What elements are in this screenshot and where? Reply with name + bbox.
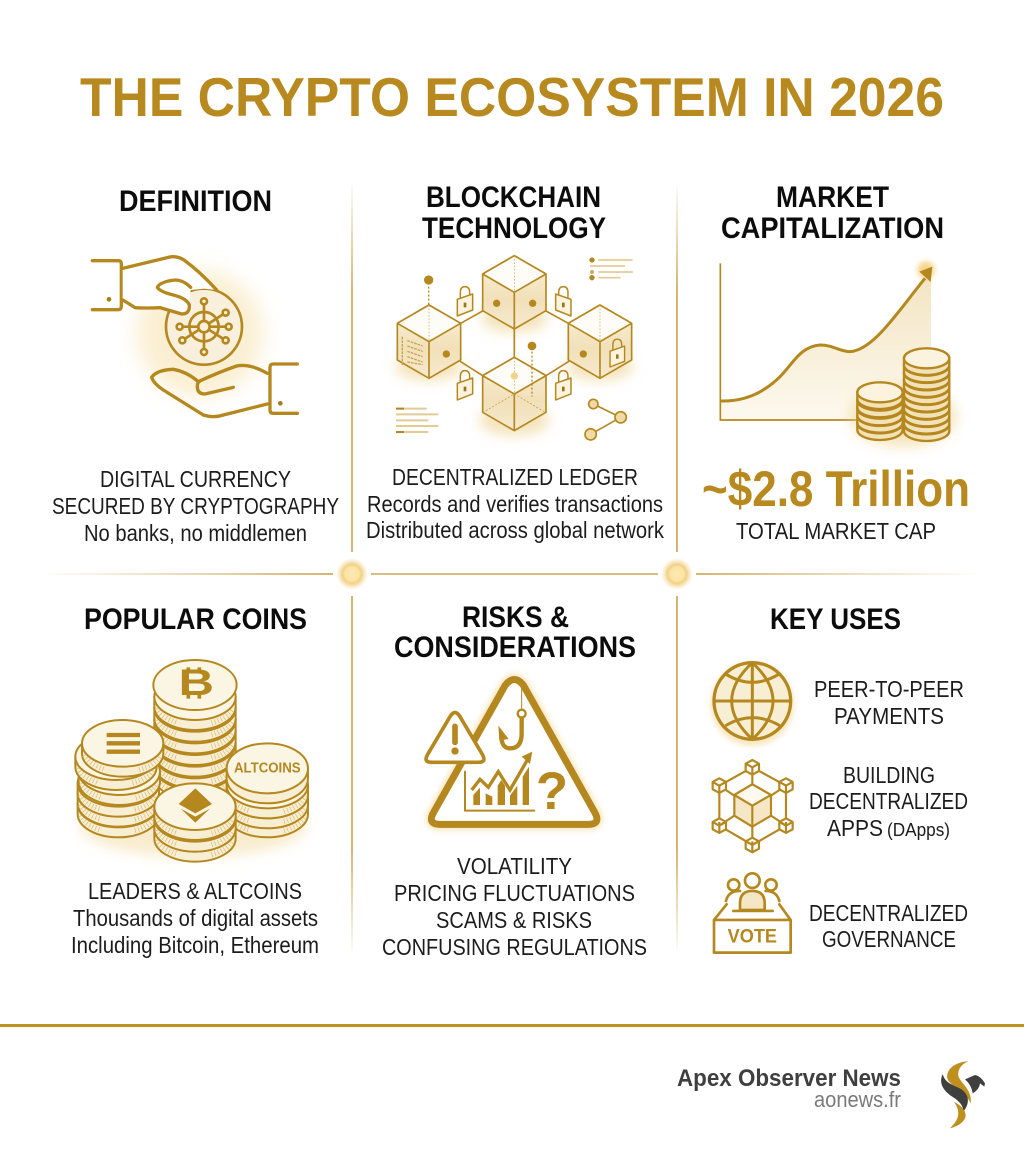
panel: risks and considerations	[382, 601, 647, 960]
bitcoin symbol: B	[179, 661, 214, 703]
text: risks	[382, 853, 647, 960]
footer brand	[677, 1061, 985, 1128]
heading: popular coins: POPULAR COINS	[84, 603, 307, 636]
text: blockchain: DECENTRALIZED LEDGER	[392, 464, 638, 490]
text: total market cap label: TOTAL MARKET CAP	[736, 518, 936, 544]
logo	[941, 1061, 985, 1128]
text: popular coins	[71, 878, 319, 958]
icon: warning triangles: ?	[536, 762, 568, 821]
panel: definition	[52, 185, 339, 546]
figure: total market cap: ~$2.8 Trillion	[702, 461, 970, 517]
heading: blockchain technology: TECHNOLOGY	[422, 212, 606, 245]
text: risks: CONFUSING REGULATIONS	[382, 934, 647, 960]
text: blockchain: Distributed across global network	[366, 517, 664, 543]
heading: market capitalization: CAPITALIZATION	[721, 212, 944, 245]
text: peer-to-peer: PAYMENTS	[834, 703, 944, 729]
heading: risks and considerations: CONSIDERATIONS	[394, 631, 636, 664]
title: THE CRYPTO ECOSYSTEM IN 2026	[80, 66, 944, 128]
text: definition	[52, 466, 339, 546]
text: decentralized apps: (DApps)	[887, 820, 950, 840]
text: definition: DIGITAL CURRENCY	[100, 466, 291, 492]
text: popular coins: Including Bitcoin, Ethereum	[71, 932, 319, 958]
brand name: Apex Observer News	[677, 1065, 901, 1092]
heading: market capitalization: MARKET	[776, 181, 889, 214]
heading: blockchain technology	[422, 181, 606, 245]
text: risks: SCAMS & RISKS	[436, 907, 592, 933]
text: governance: GOVERNANCE	[822, 926, 956, 952]
heading: market capitalization	[721, 181, 944, 245]
icon: vote box: VOTE	[728, 926, 777, 947]
icon: coin stacks	[75, 660, 308, 862]
panel: market capitalization	[702, 181, 970, 544]
panel: blockchain technology	[366, 181, 664, 543]
icon: decentralized network	[713, 760, 793, 852]
icon: vote box	[714, 873, 791, 953]
text: decentralized apps: BUILDING	[843, 762, 935, 788]
chart: market cap growth	[720, 261, 957, 447]
text: definition: No banks, no middlemen	[84, 520, 307, 546]
text: definition: SECURED BY CRYPTOGRAPHY	[52, 493, 339, 519]
icon: blockchain network	[396, 256, 633, 440]
text: decentralized apps	[809, 762, 968, 841]
icon: hands exchanging coin	[92, 257, 297, 417]
text: decentralized apps: APPS	[827, 815, 883, 841]
heading: definition: DEFINITION	[119, 185, 272, 218]
text: popular coins: LEADERS & ALTCOINS	[88, 878, 302, 904]
text: blockchain	[366, 464, 664, 543]
text: blockchain: Records and verifies transactions	[367, 491, 663, 517]
text: decentralized apps: DECENTRALIZED	[809, 788, 968, 814]
heading: blockchain technology: BLOCKCHAIN	[426, 181, 601, 214]
text: governance	[809, 900, 968, 952]
text: risks: PRICING FLUCTUATIONS	[394, 880, 635, 906]
panel: key uses	[711, 603, 968, 953]
text: peer-to-peer: PEER-TO-PEER	[814, 676, 964, 702]
panel: popular coins	[71, 603, 319, 958]
heading: risks and considerations	[394, 601, 636, 664]
heading: key uses: KEY USES	[770, 603, 901, 636]
grid dividers	[40, 180, 981, 956]
icon: warning triangles	[426, 679, 597, 824]
heading: risks and considerations: RISKS &	[462, 601, 569, 634]
icon: globe	[711, 663, 794, 746]
text: popular coins: Thousands of digital assets	[73, 905, 318, 931]
text: governance: DECENTRALIZED	[809, 900, 968, 926]
brand url: aonews.fr	[814, 1087, 901, 1112]
text: peer-to-peer	[814, 676, 964, 729]
icon: coin stacks: ALTCOINS	[234, 761, 301, 777]
text: risks: VOLATILITY	[457, 853, 572, 879]
footer rule	[0, 1024, 1024, 1027]
